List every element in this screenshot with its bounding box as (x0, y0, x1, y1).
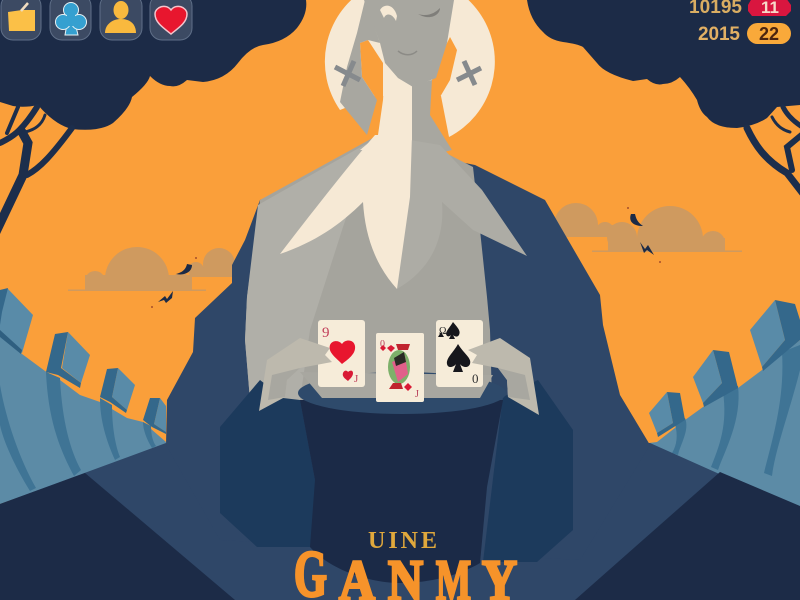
head and hair (340, 0, 454, 135)
sleeve left (220, 380, 315, 547)
birds right (627, 207, 661, 263)
collar cream (280, 135, 412, 289)
tree branches right (747, 107, 800, 195)
neck (360, 63, 412, 150)
score row one (689, 0, 791, 18)
halo (325, 0, 495, 137)
card right: spades (436, 320, 483, 387)
birds left (151, 257, 197, 308)
ground shadow left (0, 473, 235, 600)
card centre: queen of diamonds: 0 (380, 339, 385, 350)
left hair lock (340, 0, 380, 135)
hand right (468, 338, 539, 415)
card right: spades: 0 (472, 371, 478, 386)
main title (294, 538, 517, 600)
score row two: 22 (759, 24, 779, 44)
score row two: 2015 (698, 24, 740, 45)
ground (0, 443, 800, 600)
cross left (335, 61, 360, 86)
fence right (649, 300, 800, 512)
clouds left (68, 247, 234, 291)
icon: person button (100, 0, 142, 40)
sleeve right (483, 380, 573, 562)
card centre: queen of diamonds (376, 333, 424, 402)
orange gaps beside hair (360, 37, 457, 140)
icon: club button (50, 0, 91, 40)
hat body (300, 400, 503, 583)
icon: folder button (1, 0, 41, 40)
card left: nine of hearts: 9 (322, 325, 330, 341)
smile (398, 51, 417, 55)
cross right (457, 61, 481, 85)
card right: spades: Ω (439, 326, 446, 337)
card left: nine of hearts: J (354, 373, 359, 385)
hat rim (298, 372, 506, 414)
neck shade (412, 80, 452, 160)
tree canopy left (0, 0, 306, 130)
tree canopy right (527, 0, 800, 128)
score row two (698, 23, 791, 45)
ground shadow right (575, 472, 800, 600)
clouds right (556, 203, 742, 252)
hat top lining (300, 372, 493, 398)
hand left (259, 338, 332, 411)
face (364, 0, 454, 87)
figure body (245, 135, 492, 400)
open eye (380, 6, 397, 21)
body shading (245, 140, 373, 400)
card centre: queen of diamonds: J (415, 389, 419, 400)
icon: heart button (150, 0, 192, 40)
fence left (0, 288, 166, 504)
tree branches left (0, 107, 72, 232)
subtitle: UINE (368, 528, 437, 554)
collar grey right (397, 140, 527, 289)
closed eye (418, 8, 440, 17)
card left: nine of hearts (318, 320, 365, 387)
figure robe (166, 150, 650, 560)
